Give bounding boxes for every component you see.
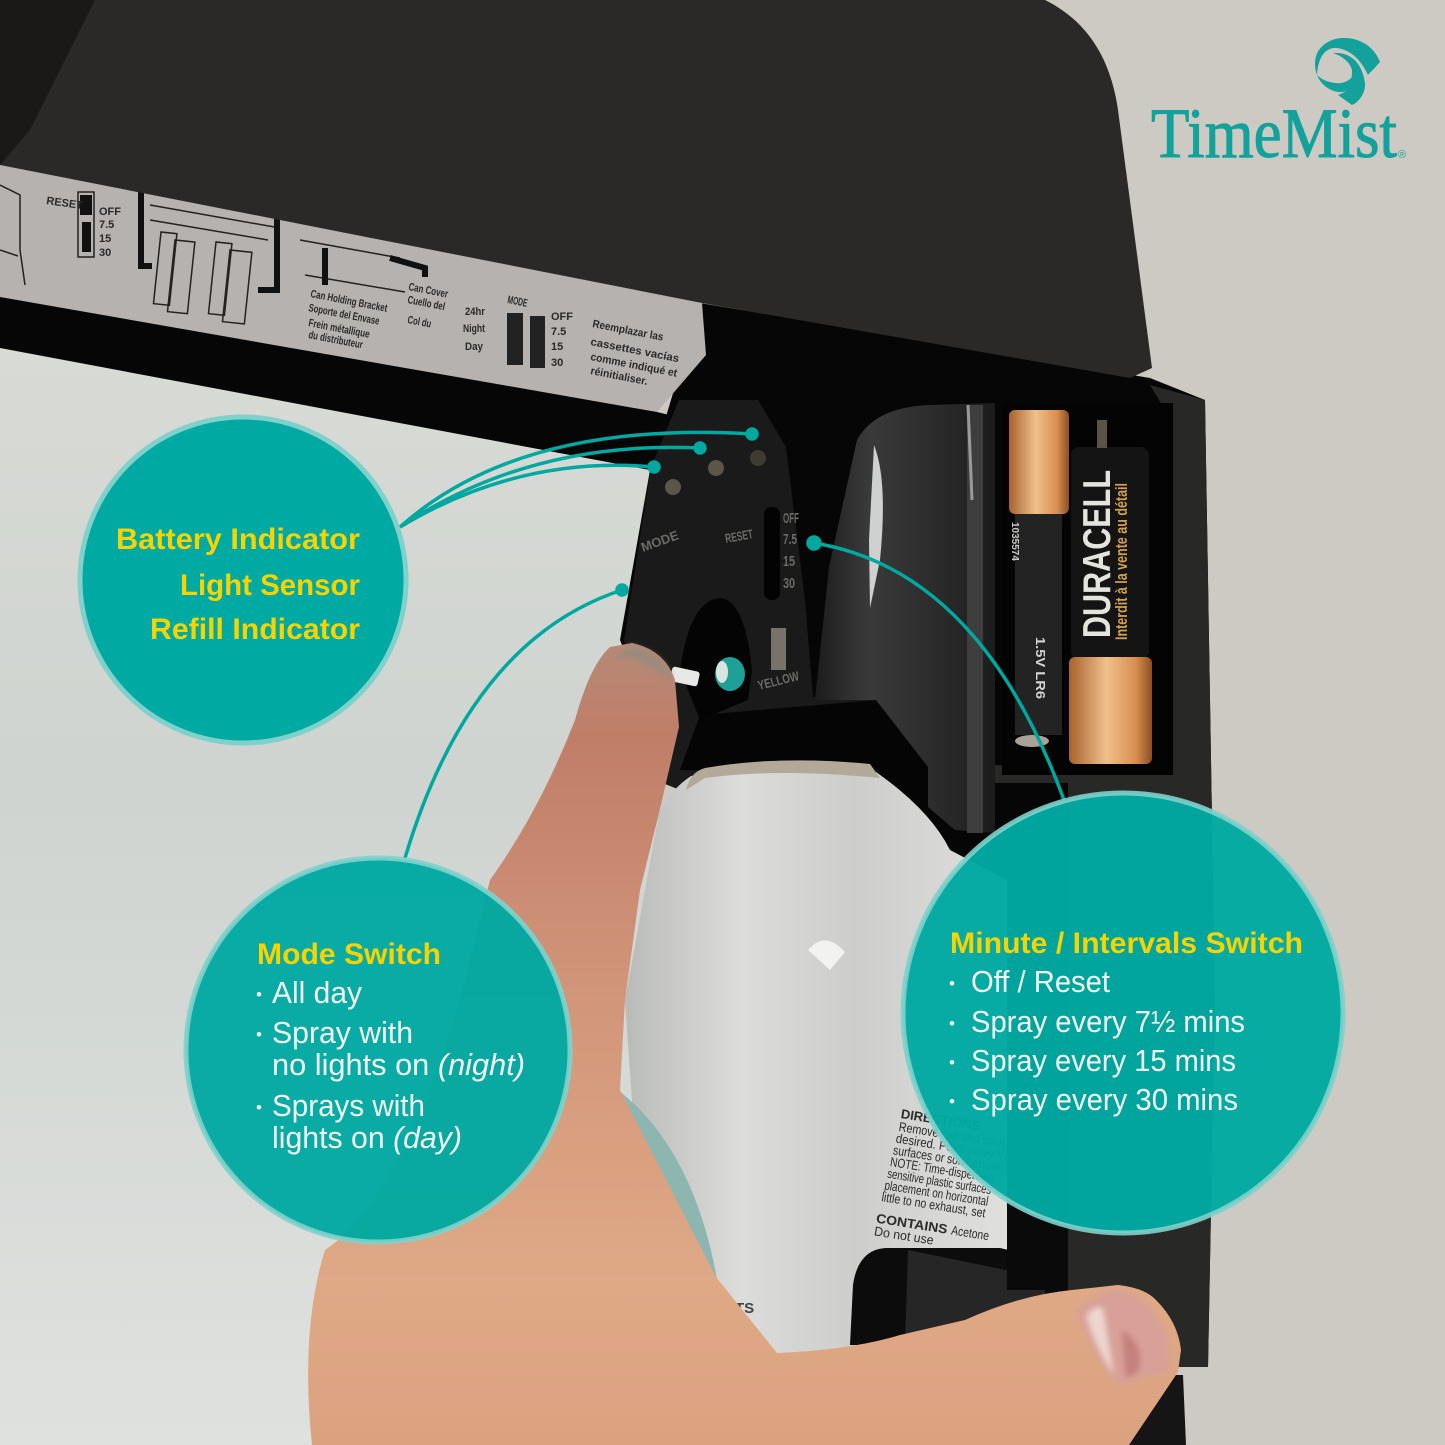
instruction label strip: Col du [406, 314, 432, 331]
dispenser back panel [0, 345, 660, 1445]
teal callout: mode switch [186, 585, 627, 1242]
instruction label strip: Can Cover [407, 281, 449, 301]
teal callout: minute intervals switch: Spray every 7½ mins [971, 1004, 1245, 1039]
batteries: DURACELL [1076, 470, 1119, 638]
control panel: 30 [783, 575, 795, 592]
aerosol can: sensitive plastic surfaces [886, 1166, 993, 1197]
control panel: 7.5 [783, 531, 797, 548]
aerosol can: CONTAINS [875, 1211, 949, 1237]
teal callout: mode switch: All day [272, 975, 362, 1010]
instruction label strip: 7.5 [99, 219, 114, 231]
instruction label strip: RESET [46, 195, 84, 212]
instruction label strip [0, 165, 706, 470]
instruction label strip: MODE [506, 294, 528, 310]
teal callout: mode switch: Mode Switch [257, 938, 441, 971]
teal callout: battery, light, refill: Light Sensor [180, 569, 360, 602]
batteries [1002, 403, 1173, 775]
control panel: YELLOW [756, 668, 801, 693]
instruction label strip: Can Holding Bracket [309, 288, 389, 315]
teal callout: mode switch: • [256, 1025, 262, 1044]
teal callout: minute intervals switch: • [949, 1092, 955, 1111]
aerosol can: little to no exhaust, set [881, 1189, 987, 1220]
aerosol can: surfaces or soft furnishings [892, 1142, 1018, 1177]
aerosol can: placement on horizontal [883, 1177, 990, 1209]
logo: TimeMist: ® [1398, 149, 1406, 161]
glossy battery cover [815, 403, 995, 833]
dispenser lid [0, 0, 1152, 378]
instruction label strip: Day [465, 341, 484, 353]
teal callout: minute intervals switch: • [949, 1014, 955, 1033]
batteries: 1035574 [1009, 522, 1020, 561]
batteries: 1.5V LR6 [1033, 637, 1048, 699]
dispenser body [620, 303, 1215, 1445]
aerosol can: TS [735, 1300, 754, 1317]
batteries: Interdit à la vente au détail [1112, 483, 1131, 640]
instruction label strip: 7.5 [551, 326, 566, 338]
lower dispenser tray [850, 1190, 1068, 1345]
instruction label strip: 24hr [465, 306, 486, 318]
instruction label strip: OFF [551, 311, 573, 323]
teal callout: mode switch: Spray with [272, 1015, 413, 1050]
teal callout: minute intervals switch: Off / Reset [971, 964, 1110, 999]
aerosol can: desired. Point away from [895, 1131, 1021, 1165]
control panel: 15 [783, 553, 795, 570]
logo: TimeMist: TimeMist [1151, 95, 1397, 173]
leader line to mode switch [405, 585, 627, 858]
aerosol can: Acetone [950, 1222, 990, 1243]
aerosol can: Do not use [873, 1223, 935, 1248]
instruction label strip: Night [463, 323, 485, 335]
teal callout: minute intervals switch [808, 537, 1343, 1233]
teal callout: mode switch: lights on (day) [272, 1120, 462, 1155]
teal callout: minute intervals switch: Minute / Intervals Switch [950, 927, 1303, 960]
aerosol can: Remove cap and spray as [898, 1119, 1024, 1153]
logo swirl icon [1315, 38, 1380, 105]
aerosol can [618, 760, 1026, 1360]
instruction label strip: comme indiqué et [589, 351, 678, 380]
leader lines to indicators [400, 429, 757, 527]
instruction label strip: cassettes vacías [589, 336, 680, 365]
instruction label strip: Cuello del [406, 294, 446, 313]
control panel: OFF [783, 510, 799, 527]
teal callout: minute intervals switch: Spray every 30 mins [971, 1082, 1238, 1117]
control panel: RESET [724, 526, 754, 546]
instruction label strip: Frein métallique [307, 317, 371, 341]
control panel [624, 400, 928, 810]
instruction label strip: 15 [551, 341, 563, 353]
instruction label strip: Reemplazar las [591, 318, 664, 344]
hand [308, 643, 1181, 1445]
instruction label strip: du distributeur [307, 329, 364, 352]
instruction label strip: 30 [99, 247, 111, 259]
aerosol can: DIRECTIONS [900, 1106, 982, 1134]
instruction label strip: 30 [551, 357, 563, 369]
control panel: MODE [639, 527, 681, 555]
teal callout: battery, light, refill: Battery Indicator [116, 523, 360, 556]
instruction label strip: Soporte del Envase [307, 302, 380, 328]
teal callout: mode switch: Sprays with [272, 1088, 425, 1123]
teal callout: battery, light, refill: Refill Indicator [150, 613, 360, 646]
teal callout: mode switch: • [256, 1098, 262, 1117]
instruction label strip: 15 [99, 233, 111, 245]
instruction label strip: réinitialiser. [589, 365, 649, 388]
teal callout: minute intervals switch: • [949, 974, 955, 993]
aerosol can: NOTE: Time-dispensed [889, 1154, 995, 1185]
teal callout: mode switch: • [256, 985, 262, 1004]
teal callout: mode switch: no lights on (night) [272, 1047, 525, 1082]
teal callout: minute intervals switch: • [949, 1053, 955, 1072]
leader line to interval switch [808, 537, 1064, 800]
teal callout: battery, light, refill [80, 417, 757, 743]
teal callout: minute intervals switch: Spray every 15 mins [971, 1043, 1236, 1078]
logo: TimeMist [1151, 38, 1406, 173]
instruction label strip: OFF [99, 206, 121, 218]
